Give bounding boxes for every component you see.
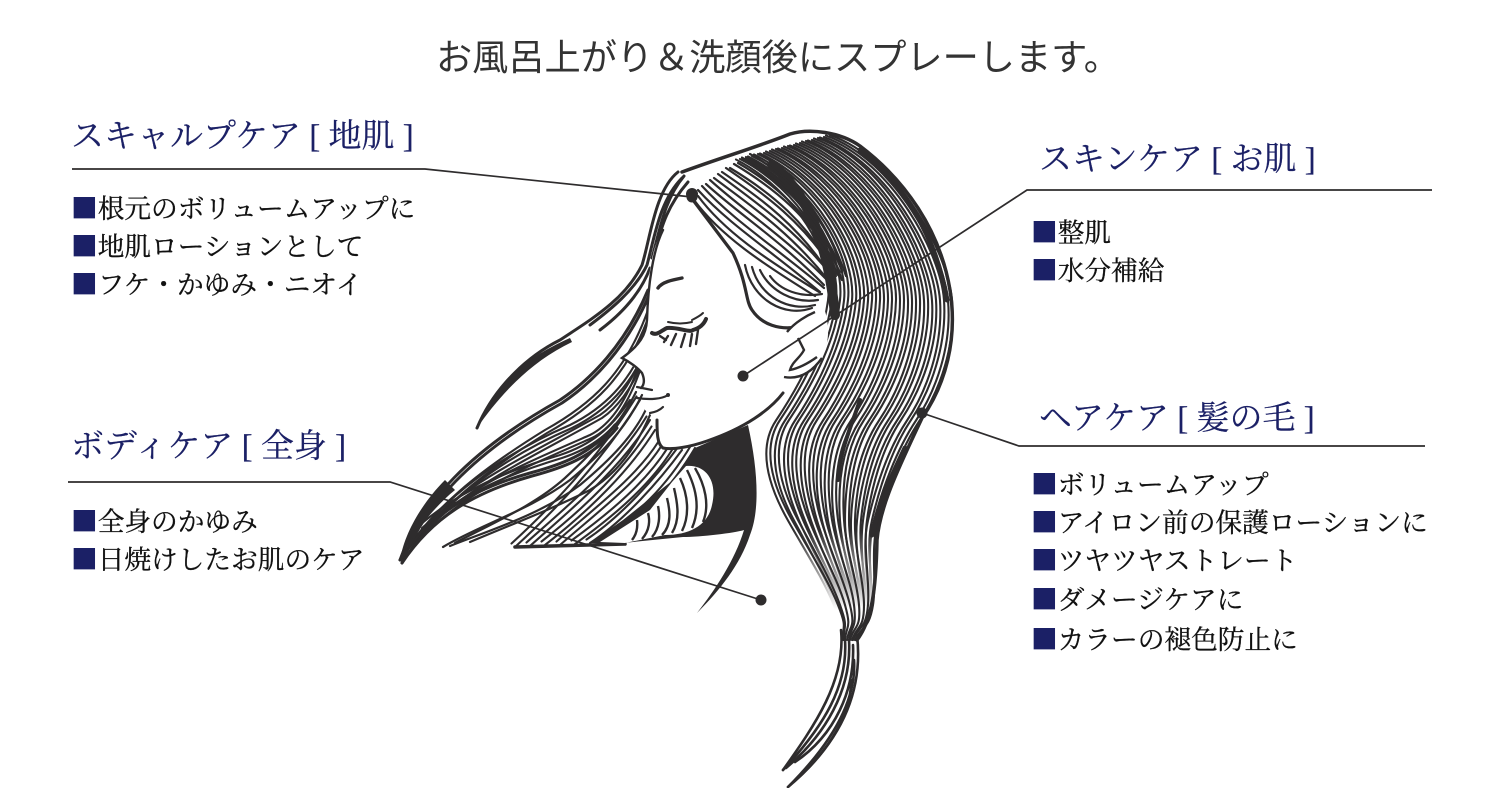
windblown hair: lower wing [515, 400, 695, 547]
list: hair care items [1031, 463, 1428, 657]
face features [622, 200, 797, 449]
temple hairline [693, 200, 797, 328]
front hair strands [694, 158, 842, 296]
illustration and leader lines [68, 130, 1432, 788]
hair tail [783, 630, 858, 787]
hair tips and crescent [400, 188, 698, 560]
windblown hair: upper wing [400, 290, 650, 560]
profile outline [622, 230, 663, 388]
neck shadow [590, 425, 757, 613]
list: body care items: ■全身のかゆみ [71, 500, 258, 539]
back hair strands: long [740, 135, 953, 640]
list: scalp care items: ■フケ・かゆみ・ニオイ [71, 263, 362, 302]
windblown hair: middle wing [443, 392, 650, 547]
leader: body care [68, 482, 766, 606]
list: hair care items: ■ツヤツヤストレート [1031, 539, 1297, 578]
list: scalp care items [71, 187, 415, 302]
panel: scalp care [71, 119, 415, 302]
lip corner [666, 393, 670, 397]
list: scalp care items: ■根元のボリュームアップに [71, 187, 415, 226]
list: skin care items [1031, 211, 1164, 288]
leader: skin care [738, 190, 1432, 382]
leader: hair care [916, 408, 1425, 446]
heading: hair care: ヘアケア [ 髪の毛 ] [1039, 401, 1315, 437]
jaw and chin line [657, 393, 783, 449]
illustration: woman with flowing hair [400, 131, 953, 787]
heading: skin care: スキンケア [ お肌 ] [1039, 142, 1316, 178]
list: hair care items: ■アイロン前の保護ローションに [1031, 501, 1428, 540]
lips [637, 387, 668, 413]
list: skin care items: ■水分補給 [1031, 249, 1164, 288]
lower hair edge [515, 544, 625, 547]
list: skin care items: ■整肌 [1031, 211, 1111, 250]
closed eye with lashes [652, 319, 706, 334]
list: hair care items: ■ダメージケアに [1031, 578, 1243, 617]
list: body care items [71, 500, 365, 577]
face-framing lock [477, 172, 688, 428]
eyebrow [658, 278, 682, 288]
temple curl strands [745, 265, 822, 311]
heading: body care: ボディケア [ 全身 ] [71, 429, 346, 465]
title: お風呂上がり＆洗顔後にスプレーします。 [436, 29, 1120, 81]
neck hair swirl [600, 466, 713, 543]
heading: scalp care: スキャルプケア [ 地肌 ] [71, 119, 414, 155]
ear [784, 308, 828, 378]
list: hair care items: ■ボリュームアップ [1031, 463, 1269, 502]
list: scalp care items: ■地肌ローションとして [71, 225, 364, 264]
leader: scalp care [72, 169, 698, 202]
crown outline and dark band [682, 131, 952, 640]
list: body care items: ■日焼けしたお肌のケア [71, 538, 365, 577]
list: hair care items: ■カラーの褪色防止に [1031, 618, 1298, 657]
back hair strands: fill-in [736, 136, 949, 640]
face [622, 205, 790, 448]
panel: hair care [1031, 401, 1428, 657]
panel: skin care [1031, 142, 1316, 288]
panel: body care [71, 428, 365, 577]
